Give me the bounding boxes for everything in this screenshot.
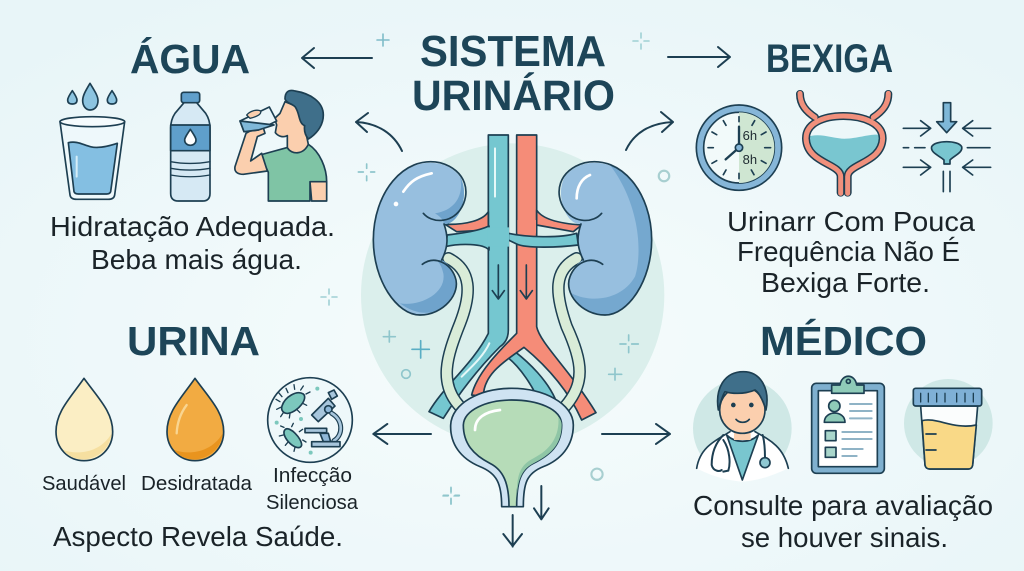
- blue connectors to kidneys: [445, 226, 578, 250]
- icons: doctor, clipboard, sample cup: [693, 372, 993, 482]
- labels: [42, 465, 359, 514]
- artery: [445, 135, 596, 420]
- decorative sparkles: [321, 33, 669, 504]
- shirt: [260, 144, 327, 201]
- panel: bexiga: Frequência Não É: [737, 236, 960, 267]
- icons: urine drops: [56, 378, 224, 461]
- bladder: [451, 388, 573, 507]
- hair: [285, 90, 323, 139]
- labels: Infecção: [273, 465, 352, 487]
- right arm: [310, 182, 327, 201]
- heading: água: ÁGUA: [130, 36, 250, 82]
- flow arrows in vessels: [492, 265, 532, 299]
- title: SISTEMA: [420, 27, 606, 76]
- panel: médico: se houver sinais.: [741, 522, 948, 553]
- ureters: [447, 258, 580, 407]
- icon: clock: 8h: [743, 152, 757, 167]
- icon: water bottle: [171, 92, 210, 201]
- icon: infection and microscope: [268, 378, 352, 462]
- icon: glass of water: [60, 117, 125, 199]
- icon: healthy drop: [56, 378, 113, 461]
- title: [412, 27, 615, 120]
- panel: bexiga: [696, 37, 991, 298]
- icon: bladder: [800, 93, 888, 193]
- left kidney: [373, 162, 466, 315]
- arrow: title to bexiga: [668, 47, 730, 67]
- background circle: [361, 143, 664, 447]
- heading: urina: URINA: [127, 318, 260, 364]
- icon: clipboard: [812, 376, 884, 473]
- icon: pressure arrows: [903, 103, 991, 192]
- panel: urina: [42, 318, 359, 552]
- panel: água: [50, 36, 335, 275]
- neck and face: [275, 102, 308, 153]
- panel: médico: [693, 318, 993, 553]
- labels: Saudável: [42, 473, 126, 495]
- vein: [429, 135, 555, 418]
- icon: clock: [696, 105, 782, 190]
- icon: doctor: [693, 372, 792, 482]
- panel: água: Beba mais água.: [91, 244, 302, 275]
- forearm: [235, 128, 267, 174]
- labels: Desidratada: [141, 473, 253, 495]
- icon: sample cup: [904, 379, 993, 469]
- glass: [240, 107, 277, 132]
- icons: clock, bladder, pressure: [696, 93, 991, 193]
- icon: water drops: [68, 83, 117, 110]
- right kidney: [559, 162, 652, 315]
- arrow: kidney to bexiga: [626, 112, 673, 150]
- panel: bexiga: Bexiga Forte.: [761, 267, 930, 298]
- icon: dehydrated drop: [167, 378, 224, 461]
- heading: bexiga: BEXIGA: [766, 37, 893, 81]
- text: urina: Aspecto Revela Saúde.: [53, 521, 343, 552]
- icons: glass and bottle: [60, 83, 210, 201]
- title: URINÁRIO: [412, 72, 615, 120]
- arrow: title to água: [302, 48, 372, 68]
- heading: médico: MÉDICO: [760, 318, 927, 364]
- icon: person drinking: [235, 90, 327, 201]
- sparkles inside circle: [358, 164, 669, 504]
- labels: Silenciosa: [266, 492, 359, 514]
- text: água: Hidratação Adequada.: [50, 211, 335, 242]
- arrows around bladder: [373, 424, 670, 547]
- text: bexiga: Urinarr Com Pouca: [727, 206, 975, 237]
- arrow: kidney to água: [356, 113, 402, 151]
- icon: clock: 6h: [743, 128, 757, 143]
- text: médico: Consulte para avaliação: [693, 490, 993, 521]
- central illustration: urinary system: [358, 135, 670, 547]
